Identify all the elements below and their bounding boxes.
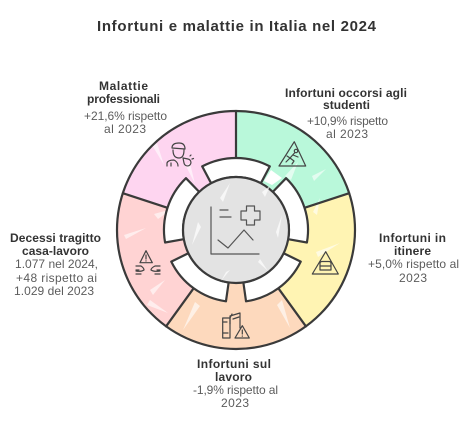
sector: malattie professionali	[123, 111, 236, 230]
white ring segment: right	[270, 176, 315, 248]
title: Infortuni e malattie in Italia nel 2024	[97, 18, 377, 35]
white ring segment: lower right	[236, 248, 306, 308]
icon: running student warning sign	[279, 142, 306, 166]
label: decessi tragitto casa-lavoro	[10, 231, 101, 298]
label: infortuni occorsi agli studenti	[285, 86, 407, 141]
label: malattie professionali	[84, 79, 167, 136]
label: infortuni sul lavoro: 2023	[221, 396, 249, 410]
label: infortuni sul lavoro: Infortuni sul	[197, 357, 271, 371]
label: infortuni occorsi agli studenti: studenti	[323, 98, 370, 112]
sector: decessi tragitto casa-lavoro	[117, 193, 236, 326]
icon: worker with whistle	[167, 143, 194, 166]
center circle	[183, 177, 289, 283]
label: decessi tragitto casa-lavoro: casa-lavoro	[22, 244, 89, 258]
label: infortuni in itinere	[368, 231, 459, 285]
label: infortuni occorsi agli studenti: al 2023	[326, 127, 368, 141]
label: infortuni in itinere: 2023	[399, 271, 427, 285]
label: infortuni in itinere: +5,0% rispetto al	[368, 257, 459, 271]
label: decessi tragitto casa-lavoro: +48 rispetto ai	[16, 271, 97, 285]
sector dividers	[123, 111, 349, 326]
donut chart	[117, 111, 355, 349]
sector: infortuni in itinere	[236, 193, 355, 326]
label: infortuni occorsi agli studenti: Infortuni occorsi agli	[285, 86, 407, 100]
outer ring	[117, 111, 355, 349]
label: malattie professionali: +21,6% rispetto	[84, 109, 167, 123]
sector: infortuni occorsi agli studenti	[236, 111, 349, 230]
label: infortuni sul lavoro: -1,9% rispetto al	[193, 383, 278, 397]
icon: car warning sign	[312, 252, 338, 274]
icon: chart and medical cross	[211, 206, 260, 254]
center sketch highlights	[192, 183, 282, 281]
white ring segment: lower left	[166, 248, 236, 308]
label: infortuni occorsi agli studenti: +10,9% rispetto	[307, 114, 388, 128]
label: infortuni sul lavoro	[193, 357, 278, 410]
label: infortuni in itinere: Infortuni in	[379, 231, 446, 245]
icon: road accident warning	[136, 251, 160, 274]
white patch in gap top right	[264, 170, 282, 185]
label: infortuni sul lavoro: lavoro	[215, 370, 252, 384]
label: malattie professionali: Malattie	[99, 79, 148, 93]
icon: workplace buildings with warning	[223, 313, 249, 338]
label: decessi tragitto casa-lavoro: 1.029 del 2023	[14, 284, 94, 298]
sector: infortuni sul lavoro	[166, 230, 306, 349]
sketch highlights on sectors	[124, 120, 351, 330]
white ring segment: left	[157, 176, 202, 248]
label: malattie professionali: al 2023	[104, 122, 146, 136]
label: malattie professionali: professionali	[87, 92, 160, 106]
label: decessi tragitto casa-lavoro: Decessi tragitto	[10, 231, 101, 245]
label: infortuni in itinere: itinere	[394, 244, 431, 258]
white ring segment: top	[202, 158, 270, 183]
label: decessi tragitto casa-lavoro: 1.077 nel 2024,	[15, 257, 98, 271]
